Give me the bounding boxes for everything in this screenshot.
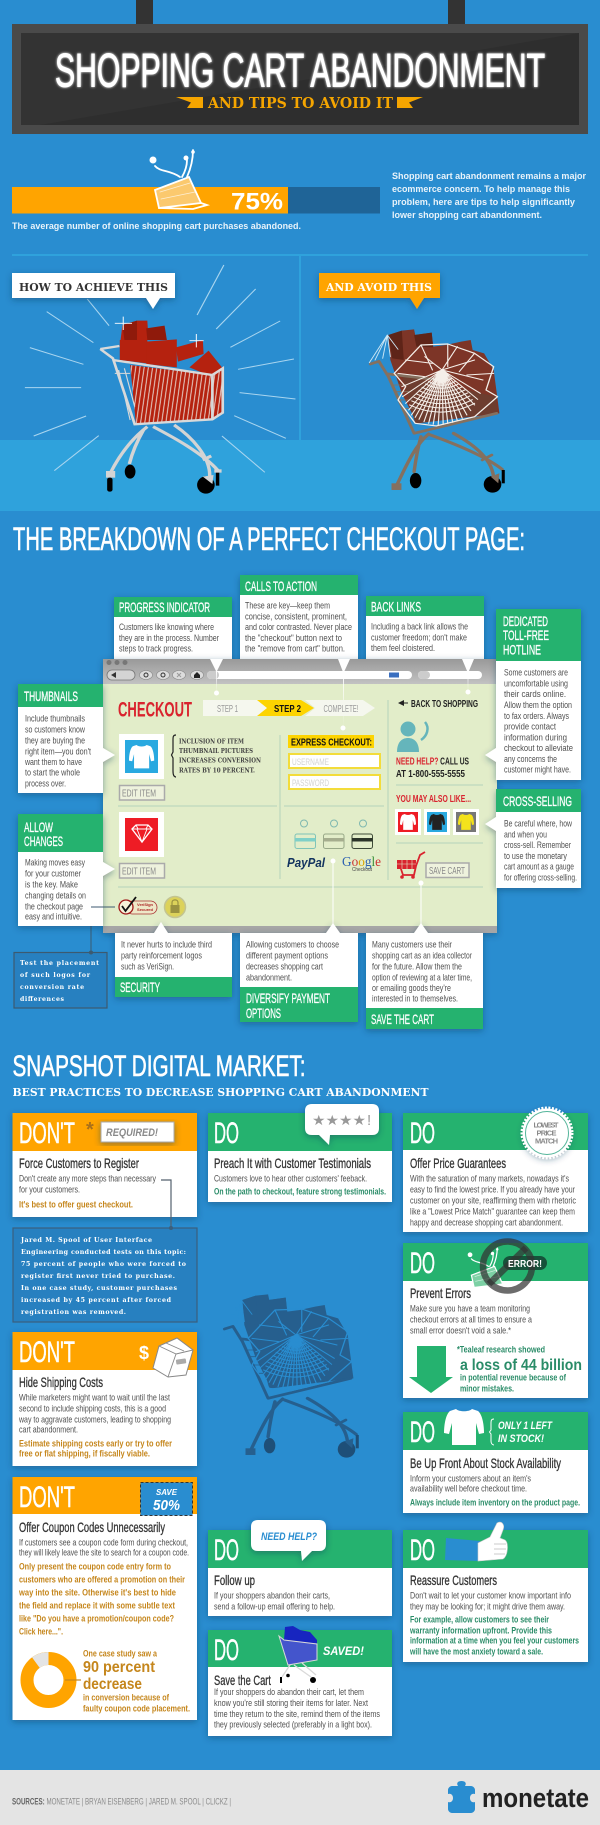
callout: Jared Spool study: increased by 45 percent after forced [21,1297,172,1304]
panel: don't force register: It's best to offer guest checkout. [19,1200,133,1210]
panel: dedicated toll-free hotline: provide contact [504,722,556,732]
panel: calls to action: the "checkout" button next to [245,633,342,644]
panel: do preach testimonials: Customers love to hear other customers' feeback. [214,1174,367,1184]
panel: do reassure customers: will have the most anxiety toward a sale. [409,1646,543,1658]
callout: Jared Spool study: register first never tried to purchase. [21,1273,175,1280]
panel: don't offer coupons: customers who are offered a promotion on their [19,1574,185,1586]
panel: save the cart: for the future. Allow them the [372,962,462,972]
panel: don't hide shipping [12,1332,197,1466]
icon: asterisk and required field: * [86,1119,94,1141]
panel: do price guarantees: Offer Price Guarantees [410,1155,506,1171]
thumbnail note: RATES BY 10 PERCENT. [179,768,255,774]
callout: test logo placement [14,950,107,1008]
panel: don't offer coupons: Offer Coupon Codes Unnecessarily [19,1519,165,1535]
subtitle with ribbons: AND TIPS TO AVOID IT [207,95,393,112]
panel: calls to action: These are key—keep them [245,600,330,612]
panel: security: such as VeriSign. [121,962,174,972]
progress steps: STEP 2 [274,703,301,715]
panel: do prevent errors: DO [410,1247,435,1280]
callout: Jared Spool study: registration was removed. [21,1309,126,1316]
thumbnail note [172,735,261,777]
panel: don't hide shipping: Estimate shipping costs early or try to offer [19,1438,172,1450]
panel: calls to action: and color contrasted. Never place [245,622,352,633]
panel: do save the cart [208,1626,392,1736]
callout: test logo placement: Test the placement [20,960,99,967]
callout: Jared Spool study: Jared M. Spool of User Interface [20,1237,152,1244]
panel: dedicated toll-free hotline: customer might have. [504,764,571,776]
express checkout form [288,735,380,789]
panel: don't offer coupons: Click here...". [19,1626,63,1638]
icon: saved blue cart [279,1626,317,1683]
panel: do stock availability: DO [410,1416,435,1449]
trust logos: VeriSign [137,903,153,907]
icon: dollar and box [139,1338,193,1377]
panel: cross-selling: cross-sell. Remember [504,840,571,851]
cross-sell items: YOU MAY ALSO LIKE... [396,794,471,805]
panel: thumbnails: they are buying the [25,736,85,746]
payment options: Google [342,855,381,870]
panel: do follow up: Follow up [214,1572,255,1588]
help hotline: AT 1-800-555-5555 [396,768,465,780]
panel: back links [366,596,484,666]
panel: thumbnails: right item—you don't [25,746,91,758]
panel: don't hide shipping: second to include shipping costs, this is a good [19,1404,166,1414]
item 2 thumbnail [119,812,164,878]
panel: calls to action [240,575,358,667]
callout: and avoid this [319,273,440,309]
express checkout form: USERNAME [292,757,329,768]
icon: need help bubble [251,1520,326,1561]
browser window mockup [91,659,497,952]
icon: coupon [140,1482,192,1516]
intro paragraph [392,171,586,221]
panel: back links: customer freedom; don't make [371,632,467,644]
panel: don't hide shipping: DON'T [19,1336,75,1369]
stat: 90 percent decrease: in conversion because of [83,1692,170,1704]
express checkout form: EXPRESS CHECKOUT: [291,736,372,748]
payment options: PayPal [287,855,325,870]
panel: thumbnails: THUMBNAILS [24,688,78,704]
panel: don't offer coupons: way into the site. Otherwise it's best to hide [18,1588,176,1598]
panel: do save the cart: Save the Cart [214,1672,271,1688]
panel: do reassure customers: For example, allow customers to see their [410,1614,549,1626]
panel: save the cart: Many customers use their [372,940,452,950]
panel: thumbnails: to start the whole [25,768,80,778]
panel: diversify payment options: different payment options [246,950,328,962]
trust logos: Secured [137,908,153,912]
icon: cart error no sign [468,1242,547,1290]
donut chart 90 percent [18,1650,81,1710]
panel: diversify payment options: decreases shopping cart [246,962,323,972]
progress steps: COMPLETE! [324,704,358,715]
panel: thumbnails: Include thumbnails [25,714,85,724]
panel: do price guarantees [403,1108,588,1232]
panel: do stock availability: availability well before checkout time. [410,1484,527,1494]
panel: allow changes: easy and intuitive. [25,912,82,922]
panel: do preach testimonials: DO [214,1117,239,1150]
callout: test logo placement: conversion rate [20,984,84,991]
panel: cross-selling: to use the monetary [504,851,567,862]
progress steps [203,700,375,716]
icon: lowest price badge: MATCH [535,1136,558,1146]
panel: do stock availability [403,1409,588,1513]
panel: back links: BACK LINKS [371,598,421,614]
panel: don't offer coupons: Only present the coupon code entry form to [19,1562,171,1572]
panel: don't hide shipping: free or flat shipping, if fiscally viable. [19,1448,150,1460]
stat caption: The average number of online shopping cart purchases abandoned. [12,221,301,232]
stat: loss of 44 billion: a loss of 44 billion [460,1357,582,1374]
panel: don't offer coupons: DON'T [19,1481,75,1514]
panel: don't offer coupons: like "Do you have a promotion/coupon code? [19,1614,174,1624]
panel: do save the cart: time they return to the site, remind them of the items [214,1709,380,1720]
heading: snapshot digital market [12,1050,429,1099]
callout: test logo placement: of such logos for [20,972,91,979]
panel: thumbnails: so customers know [25,724,85,736]
callout: Jared Spool study: Engineering conducted tests on this topic: [21,1249,186,1256]
thumbnail note: THUMBNAIL PICTURES [179,748,253,755]
panel: do follow up: If your shoppers abandon their carts, [214,1590,330,1602]
trust logos [119,896,186,918]
ghost cobweb cart [223,1294,359,1458]
panel: dedicated toll-free hotline: information during [504,732,567,744]
stat: loss of 44 billion: minor mistakes. [460,1384,514,1394]
panel: allow changes: ALLOW [24,819,53,835]
back to shopping link [398,698,478,710]
panel: diversify payment options: DIVERSIFY PAYMENT [246,990,330,1006]
panel: dedicated toll-free hotline: DEDICATED [503,613,548,629]
panel: allow changes: is the key. Make [25,880,78,890]
callout: Jared Spool study [13,1226,197,1322]
panel: don't hide shipping: way to aggravate customers, leading to shopping [18,1414,171,1426]
panel: thumbnails: process over. [25,778,66,790]
item 1 thumbnail [119,734,164,800]
icon: review bubble: ★★★★ [312,1112,366,1128]
icon: lowest price badge [522,1108,572,1158]
panel: do reassure customers: warranty information upfront. Provide this [409,1626,552,1636]
panel: do save the cart: If your shoppers do abandon their cart, let them [214,1687,364,1698]
panel: dedicated toll-free hotline: HOTLINE [503,642,541,658]
panel: do save the cart: they previously selected (preferably in a light box). [214,1720,372,1730]
icon: coupon: SAVE [156,1487,177,1497]
monetate logo: monetate [482,1783,589,1813]
icon: review bubble: ! [367,1112,371,1129]
stat bar 75%: 75% [231,188,283,216]
panel: do reassure customers: Reassure Customers [410,1572,497,1588]
panel: diversify payment options: abandonment. [246,972,292,984]
panel: diversify payment options [240,923,358,1022]
back to shopping link: BACK TO SHOPPING [411,698,478,710]
monetate logo [448,1781,589,1813]
intro paragraph: lower shopping cart abandonment. [392,210,542,221]
footer [0,1770,600,1825]
icon: asterisk and required field: REQUIRED! [106,1127,158,1139]
help hotline: NEED HELP? CALL US [396,756,469,768]
panel: calls to action: the "remove from cart" button. [245,644,345,654]
panel: do preach testimonials [208,1104,392,1202]
save cart button: SAVE CART [429,866,465,877]
panel: do prevent errors: checkout errors at all times to ensure a [410,1314,533,1326]
heading: snapshot digital market: BEST PRACTICES TO DECREASE SHOPPING CART ABANDONMENT [12,1085,429,1099]
panel: progress indicator: they are in the process. Number [119,633,219,644]
panel: do prevent errors: Make sure you have a team monitoring [410,1304,530,1314]
panel: security: SECURITY [120,979,160,995]
intro paragraph: problem, here are tips to help significantly [392,197,576,208]
panel: dedicated toll-free hotline: Some customers are [504,668,568,678]
panel: diversify payment options: Allowing customers to choose [246,940,339,950]
panel: don't force register: DON'T [19,1117,75,1150]
panel: back links: them feel cloistered. [371,643,435,654]
panel: cross-selling: Be careful where, how [504,818,572,830]
item 1 thumbnail: EDIT ITEM [122,788,156,800]
callout: and avoid this: AND AVOID THIS [325,280,432,294]
stat bar 75% [12,150,380,216]
panel: don't force register: Force Customers to Register [19,1155,139,1171]
panel: don't offer coupons: they will likely leave the site to search for a coupon code. [19,1548,189,1558]
stat: loss of 44 billion [457,1344,582,1394]
panel: security: party reinforcement logos [121,950,202,962]
icon: thumbs up [445,1522,507,1561]
illustration: cart with cobweb [369,329,505,493]
panel: save the cart: interested in to themselves. [372,994,458,1004]
heading: snapshot digital market: SNAPSHOT DIGITAL MARKET: [12,1050,306,1083]
panel: allow changes: Making moves easy [25,858,85,868]
panel: cross-selling: and when you [504,830,547,840]
icon: lowest price badge: LOWEST [534,1120,559,1130]
panel: calls to action: concise, consistent, prominent, [245,612,347,622]
panel: do reassure customers [403,1522,588,1662]
panel: do save the cart: SAVED! [323,1646,364,1658]
stat: 90 percent decrease: faulty coupon code placement. [83,1704,190,1714]
icon: lowest price badge: PRICE [536,1128,556,1138]
intro paragraph: Shopping cart abandonment remains a major [392,171,586,182]
cross-sell items [395,794,479,835]
callout: how to achieve this: HOW TO ACHIEVE THIS [19,280,168,294]
panel: thumbnails [18,684,115,793]
panel: calls to action: CALLS TO ACTION [245,578,317,594]
panel: dedicated toll-free hotline: TOLL-FREE [503,627,549,643]
thumbnail note: INCLUSION OF ITEM [179,738,244,746]
panel: thumbnails: want them to have [24,757,82,768]
callout: test logo placement: differences [20,996,65,1003]
panel: dedicated toll-free hotline: to fax orders. Always [504,711,569,722]
panel: do stock availability: Inform your customers about an item's [410,1474,531,1484]
panel: dedicated toll-free hotline: their cards online. [504,689,566,700]
heading: checkout: CHECKOUT [118,698,192,722]
icon: dollar and box: $ [139,1343,149,1363]
icon: shirt with stock note [444,1409,553,1445]
item 2 thumbnail: EDIT ITEM [122,866,156,878]
stat: loss of 44 billion: in potential revenue because of [460,1372,567,1384]
payment options [287,820,381,925]
save cart button [397,852,469,925]
express checkout form: PASSWORD [292,778,329,789]
panel: save the cart [366,923,483,1029]
illustration: full cart with rays [25,265,295,494]
panel: do save the cart: know you're still storing their items for later. Next [214,1698,368,1709]
panel: save the cart: or emailing goods they're [372,983,451,994]
panel: don't hide shipping: Hide Shipping Costs [19,1374,103,1390]
stat: 90 percent decrease: 90 percent [83,1659,156,1676]
panel: don't offer coupons [12,1477,197,1720]
panel: diversify payment options: OPTIONS [246,1005,281,1021]
panel: don't force register: for your customers. [19,1184,80,1196]
panel: progress indicator: PROGRESS INDICATOR [119,599,210,615]
payment options: Checkout [352,867,373,873]
icon: asterisk and required field [86,1119,174,1142]
panel: dedicated toll-free hotline: any concerns the [504,754,557,765]
panel: dedicated toll-free hotline: checkout to alleviate [504,743,573,754]
panel: do reassure customers: DO [410,1534,435,1567]
panel: do follow up: send a follow-up email offering to help. [214,1602,335,1612]
panel: dedicated toll-free hotline [485,609,581,780]
panel: security: It never hurts to include third [121,940,212,950]
panel: don't hide shipping: While marketers might want to wait until the last [19,1392,170,1404]
panel: do prevent errors: Prevent Errors [410,1285,471,1301]
panel: allow changes: CHANGES [24,833,63,849]
progress steps: STEP 1 [217,704,238,715]
icon: cart error no sign: ERROR! [508,1258,542,1270]
panel: do preach testimonials: Preach It with Customer Testimonials [214,1155,371,1171]
panel: back links: Including a back link allows the [371,622,468,632]
intro paragraph: ecommerce concern. To help manage this [392,184,570,195]
icon: need help bubble: NEED HELP? [261,1531,317,1543]
panel: allow changes: for your customer [25,868,81,880]
panel: do prevent errors: small error doesn't void a sale.* [410,1326,511,1336]
stat: 90 percent decrease: One case study saw a [83,1648,158,1660]
panel: don't force register: Don't create any more steps than necessary [19,1174,156,1184]
panel: save the cart: shopping cart as an idea collector [372,950,472,962]
panel: do preach testimonials: On the path to checkout, feature strong testimonials. [214,1186,386,1198]
panel: do follow up: DO [214,1534,239,1567]
callout: Jared Spool study: 75 percent of people who were forced to [21,1261,186,1268]
icon: shirt with stock note: IN STOCK! [498,1433,544,1445]
callout: how to achieve this [12,273,175,309]
icon: shirt with stock note: ONLY 1 LEFT [498,1420,553,1432]
panel: allow changes: changing details on [25,890,86,902]
panel: dedicated toll-free hotline: uncomfortable using [504,678,568,690]
panel: cross-selling [485,789,581,888]
panel: don't offer coupons: If customers see a coupon code form during checkout, [19,1538,188,1548]
stat: loss of 44 billion: *Tealeaf research showed [457,1344,545,1356]
panel: security [115,922,232,997]
sources: SOURCES: MONETATE | BRYAN EISENBERG | JARED M. SPOOL | CLICKZ | [12,1796,231,1806]
panel: progress indicator: steps to track progress. [119,644,193,654]
panel: don't offer coupons: the field and replace it with some subtle text [19,1600,176,1612]
icon: coupon: 50% [153,1497,180,1514]
panel: dedicated toll-free hotline: Allow them the option [504,700,572,711]
panel: allow changes: the checkout page [25,902,83,912]
panel: progress indicator [114,597,232,667]
panel: allow changes [18,814,115,926]
stat: 90 percent decrease: decrease [83,1676,142,1693]
panel: do prevent errors [403,1242,588,1398]
panel: do save the cart: DO [214,1634,239,1667]
panel: progress indicator: Customers like knowing where [119,622,214,633]
panel: don't force register [12,1113,197,1217]
thumbnail note: INCREASES CONVERSION [179,758,261,764]
panel: don't hide shipping: cart abandonment. [19,1424,78,1436]
panel: save the cart: option of reviewing at a later time, [372,972,472,984]
stat: 90 percent decrease [83,1648,190,1714]
panel: save the cart: SAVE THE CART [371,1011,434,1027]
icon: down arrow [409,1346,453,1393]
icon: review bubble [305,1104,379,1145]
panel: do price guarantees: DO [410,1117,435,1150]
floor band [0,440,600,511]
callout: Jared Spool study: In one case study, customer purchases [21,1285,177,1292]
help hotline [396,722,469,780]
icon: abandoned cart [150,150,207,209]
title sign [12,0,588,134]
panel: do follow up [208,1520,392,1616]
